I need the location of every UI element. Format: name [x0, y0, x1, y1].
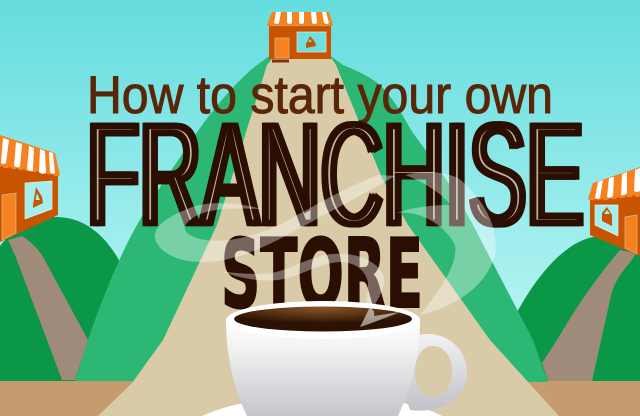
central green mountain [75, 52, 548, 382]
coffee surface [234, 306, 412, 332]
right hill [490, 237, 640, 381]
shop door [275, 38, 289, 58]
left shop wall [0, 165, 58, 242]
left shop awning [0, 135, 60, 176]
cup handle [400, 334, 467, 411]
left shop door [2, 193, 16, 240]
steam swirl [155, 172, 496, 327]
title word: STORE: STORE [221, 220, 423, 330]
shop bag icon [306, 36, 316, 48]
right shop window [595, 205, 618, 236]
right shop bag icon [602, 207, 612, 226]
saucer [202, 403, 442, 416]
left hill path [8, 236, 88, 380]
shop: right [588, 167, 640, 256]
left shop window [25, 181, 52, 219]
shop awning [267, 12, 333, 26]
central road [98, 59, 559, 416]
title line: How to start your own: How to start your own [87, 66, 553, 125]
coffee cup [226, 301, 467, 416]
shop window [297, 32, 326, 52]
right hill path [542, 250, 636, 381]
ground [0, 381, 640, 416]
right shop door [625, 215, 637, 254]
shop: top [267, 12, 333, 62]
steam rising from coffee [360, 309, 400, 327]
shop: left [0, 135, 60, 242]
cup body [226, 321, 420, 416]
left shop bag icon [33, 187, 43, 208]
title word: FRANCHISE [90, 121, 584, 228]
left hill [0, 217, 150, 381]
cup rim [226, 301, 420, 339]
shop doormat [272, 60, 289, 62]
shop wall [269, 26, 331, 59]
right shop awning [588, 167, 640, 200]
right shop wall [590, 188, 640, 256]
